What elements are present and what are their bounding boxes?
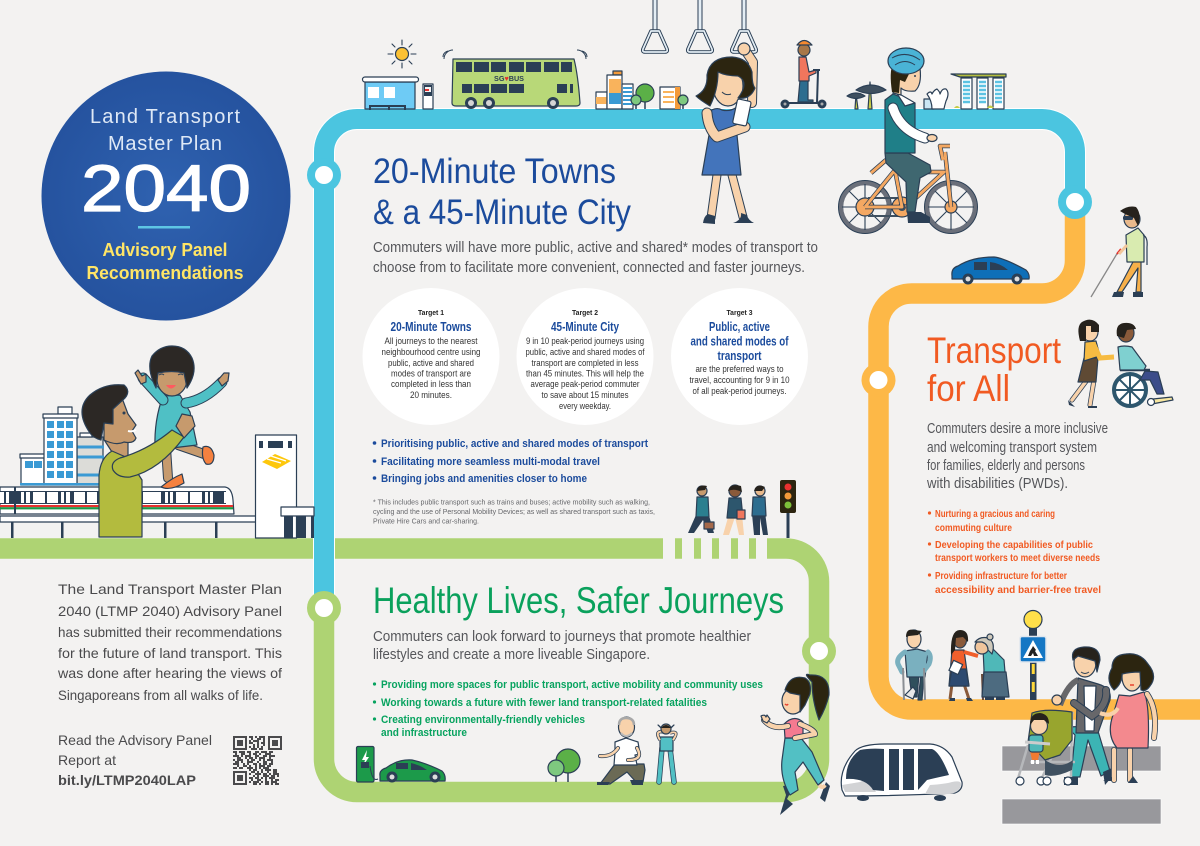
illustration: father lifting child bbox=[82, 346, 229, 537]
target 1: neighbourhood centre using bbox=[382, 347, 481, 357]
blue transit line bbox=[324, 119, 1075, 608]
bullets: transport for all: transport workers to meet diverse needs bbox=[935, 553, 1100, 564]
target 1: 20-Minute Towns bbox=[390, 320, 472, 334]
text block: LTMP introduction: The Land Transport Master Plan bbox=[58, 581, 282, 597]
text block: transport for all intro: for families, elderly and persons bbox=[927, 458, 1085, 474]
title badge: Recommendations bbox=[86, 262, 244, 283]
title badge: Master Plan bbox=[108, 133, 222, 155]
bullets: 20-minute towns bbox=[373, 438, 648, 485]
icon: QR code bbox=[233, 736, 282, 785]
bullets: transport for all: accessibility and barrier-free travel bbox=[935, 585, 1101, 596]
text block: LTMP introduction: was done after hearing the views of bbox=[57, 665, 282, 681]
text block: 20-minute towns intro: Commuters will have more public, active and shared* modes of transport to bbox=[373, 240, 818, 256]
target 1: public, active and shared bbox=[388, 358, 474, 368]
text block: LTMP introduction: for the future of land transport. This bbox=[58, 645, 282, 661]
panel: 20-minute towns heading bbox=[373, 152, 631, 232]
illustration: woman with phone bbox=[696, 43, 755, 224]
target 3 bbox=[671, 288, 808, 425]
text block: LTMP introduction bbox=[57, 581, 282, 703]
target 2: 9 in 10 peak-period journeys using bbox=[526, 336, 644, 346]
target 1: 20 minutes. bbox=[410, 390, 452, 400]
illustration: station building bbox=[256, 435, 314, 538]
illustration: crossing markings bbox=[1002, 746, 1161, 824]
illustration: SG bus: SG♥BUS bbox=[494, 74, 524, 83]
text block: read the panel link bbox=[58, 732, 212, 788]
target 1: All journeys to the nearest bbox=[384, 336, 478, 346]
target 1 bbox=[362, 288, 500, 425]
bullets: healthy lives: Creating environmentally-friendly vehicles bbox=[381, 714, 585, 726]
target 2: to save about 15 minutes bbox=[542, 390, 629, 400]
panel: 20-minute towns heading: 20-Minute Towns bbox=[373, 152, 616, 191]
target 3: are the preferred ways to bbox=[696, 364, 784, 374]
footnote: Private Hire Cars and car-sharing. bbox=[373, 518, 479, 526]
text block: healthy lives intro: Commuters can look forward to journeys that promote healthier bbox=[373, 629, 751, 645]
illustration: blue car bbox=[952, 257, 1029, 284]
illustration: pedestrian crossing sign bbox=[1020, 610, 1046, 700]
target 3: of all peak-period journeys. bbox=[692, 386, 786, 396]
illustration: visually impaired man with cane bbox=[1091, 206, 1147, 297]
bullets: transport for all: Developing the capabilities of public bbox=[935, 540, 1093, 551]
illustration: carer pushing wheelchair user bbox=[1068, 320, 1173, 408]
text block: healthy lives intro bbox=[373, 629, 751, 663]
illustration: small town buildings and trees bbox=[596, 71, 688, 109]
illustration: family with stroller bbox=[1016, 647, 1155, 785]
text block: transport for all intro bbox=[926, 421, 1108, 492]
footnote: * This includes public transport such as trains and buses; active mobility such as walking, bbox=[373, 500, 650, 506]
target 2: Target 2 bbox=[572, 308, 598, 317]
title badge bbox=[42, 72, 290, 320]
footnote bbox=[373, 500, 655, 526]
text block: transport for all intro: Commuters desire a more inclusive bbox=[927, 421, 1108, 437]
text block: transport for all intro: with disabilities (PWDs). bbox=[926, 476, 1068, 492]
illustration: e-scooter rider bbox=[780, 40, 826, 108]
target 1: Target 1 bbox=[418, 308, 444, 317]
orange transit line bbox=[878, 202, 1200, 710]
bullets: healthy lives bbox=[373, 679, 763, 739]
target 2: 45-Minute City bbox=[551, 320, 619, 334]
illustration: supertrees bbox=[847, 82, 886, 109]
bullets: healthy lives: Providing more spaces for public transport, active mobility and community uses bbox=[381, 679, 763, 691]
text block: read the panel link: bit.ly/LTMP2040LAP bbox=[58, 772, 196, 788]
illustration: trees bbox=[548, 749, 580, 782]
bullets: 20-minute towns: Facilitating more seamless multi-modal travel bbox=[381, 456, 600, 468]
illustration: autonomous shuttle bbox=[841, 744, 962, 801]
bullets: healthy lives: and infrastructure bbox=[381, 727, 467, 739]
illustration: Marina Bay skyline bbox=[924, 74, 1006, 109]
illustration: train handles bbox=[643, 0, 756, 52]
title badge: 2040 bbox=[81, 151, 251, 225]
target 2: transport are completed in less bbox=[532, 358, 639, 368]
illustration: city skyline bbox=[20, 407, 104, 486]
panel: healthy lives heading: Healthy Lives, Safer Journeys bbox=[373, 580, 784, 621]
panel: transport for all heading bbox=[927, 330, 1062, 409]
target 2: every weekday. bbox=[559, 401, 611, 411]
target 1: modes of transport are bbox=[391, 368, 471, 378]
panel: transport for all heading: for All bbox=[927, 368, 1010, 409]
target 1: completed in less than bbox=[391, 379, 471, 389]
illustration: SG bus bbox=[443, 50, 587, 109]
illustration: MRT train and viaduct bbox=[0, 487, 256, 538]
text block: LTMP introduction: Singaporeans from all walks of life. bbox=[58, 687, 263, 703]
bullets: transport for all: commuting culture bbox=[935, 523, 1012, 534]
target 2: public, active and shared modes of bbox=[526, 347, 645, 357]
illustration: EV charger and car bbox=[356, 746, 445, 782]
illustration: pedestrians walking bbox=[688, 485, 768, 535]
illustration: cyclist on bicycle bbox=[838, 48, 978, 234]
panel: 20-minute towns heading: & a 45-Minute City bbox=[373, 193, 631, 232]
target 3: Target 3 bbox=[726, 308, 752, 317]
target 2: average peak-period commuter bbox=[530, 379, 640, 389]
panel: transport for all heading: Transport bbox=[927, 330, 1062, 371]
target 3: and shared modes of bbox=[690, 334, 789, 348]
illustration: woman helping elderly lady bbox=[949, 630, 1009, 701]
bullets: 20-minute towns: Prioritising public, active and shared modes of transport bbox=[381, 438, 648, 450]
text block: read the panel link: Report at bbox=[58, 752, 116, 768]
text block: transport for all intro: and welcoming transport system bbox=[927, 440, 1097, 456]
text block: healthy lives intro: lifestyles and create a more liveable Singapore. bbox=[373, 647, 650, 663]
bullets: transport for all: Nurturing a gracious and caring bbox=[935, 509, 1055, 520]
illustration: child in stroller bbox=[1016, 710, 1075, 785]
illustration: bus shelter and sun bbox=[362, 40, 433, 110]
station markers bbox=[307, 158, 1092, 668]
bullets: healthy lives: Working towards a future with fewer land transport-related fatalities bbox=[381, 697, 707, 709]
target 3: travel, accounting for 9 in 10 bbox=[690, 375, 790, 385]
illustration: traffic light bbox=[780, 480, 796, 538]
text block: LTMP introduction: 2040 (LTMP 2040) Advisory Panel bbox=[58, 603, 282, 619]
footnote: cycling and the use of Personal Mobility Devices; as well as shared transport such as taxis, bbox=[373, 509, 655, 516]
bullets: transport for all bbox=[928, 509, 1101, 596]
illustration: tai chi man and child bbox=[597, 717, 676, 785]
title badge: Land Transport bbox=[90, 106, 240, 128]
green transit line bbox=[0, 548, 819, 792]
text block: read the panel link: Read the Advisory Panel bbox=[58, 732, 212, 748]
bullets: 20-minute towns: Bringing jobs and amenities closer to home bbox=[381, 473, 587, 485]
target 2 bbox=[516, 288, 654, 425]
illustration: man on crutches bbox=[898, 630, 930, 700]
illustration: jogging woman bbox=[761, 674, 830, 815]
bullets: transport for all: Providing infrastructure for better bbox=[935, 571, 1067, 582]
text block: 20-minute towns intro: choose from to facilitate more convenient, connected and faster journeys. bbox=[373, 260, 805, 276]
text block: 20-minute towns intro bbox=[373, 240, 818, 276]
target 3: transport bbox=[718, 349, 762, 363]
target 2: than 45 minutes. This will help the bbox=[526, 368, 644, 378]
text block: LTMP introduction: has submitted their recommendations bbox=[58, 624, 282, 640]
title badge: Advisory Panel bbox=[102, 239, 228, 260]
target 3: Public, active bbox=[709, 320, 770, 334]
